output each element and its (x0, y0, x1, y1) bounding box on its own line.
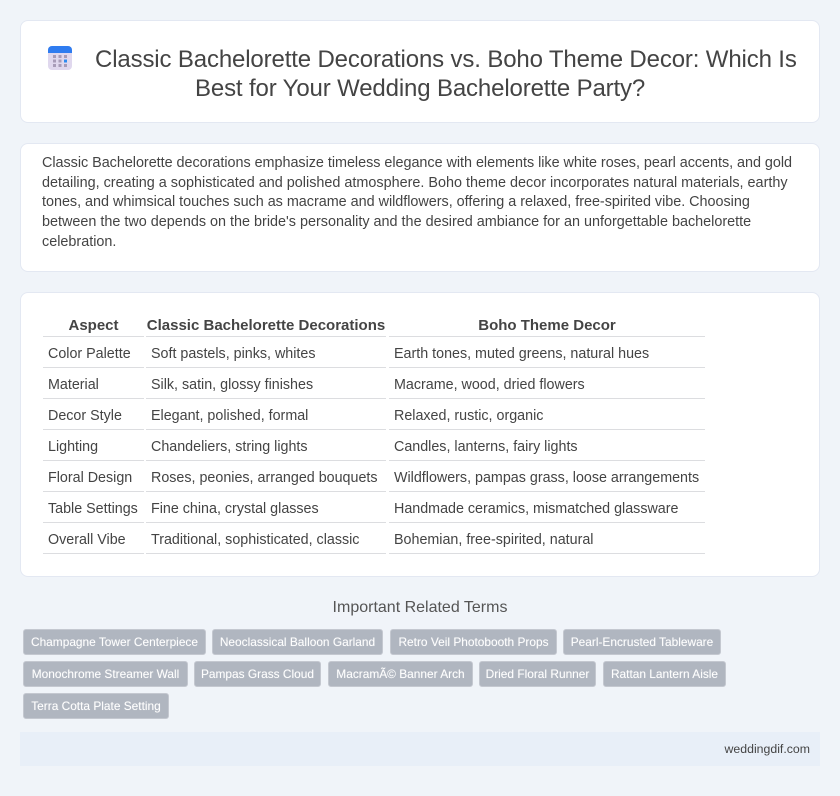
footer bar (20, 732, 820, 766)
title: Classic Bachelorette Decorations vs. Boho Theme Decor: Which Is (95, 46, 797, 73)
panel: header (20, 20, 820, 123)
title (95, 46, 797, 102)
related terms tags: Pampas Grass Cloud (201, 667, 314, 681)
summary text: Classic Bachelorette decorations emphasize timeless elegance with elements like white roses, pearl accents, and gold (42, 155, 792, 171)
comparison table: Wildflowers, pampas grass, loose arrangements (394, 470, 699, 486)
summary text: detailing, creating a sophisticated and polished atmosphere. Boho theme decor incorporates natural materials, earthy (42, 175, 788, 191)
comparison table: Bohemian, free-spirited, natural (394, 532, 593, 548)
related terms tags: Pearl-Encrusted Tableware (571, 635, 713, 649)
panel: comparison table (20, 292, 820, 577)
comparison table: Decor Style (48, 408, 122, 424)
related terms tags: MacramÃ© Banner Arch (336, 667, 465, 681)
comparison table: Macrame, wood, dried flowers (394, 377, 585, 393)
comparison table: Handmade ceramics, mismatched glassware (394, 501, 678, 517)
summary text: tones, and whimsical touches such as macrame and wildflowers, offering a relaxed, free-spirited vibe. Choosing (42, 194, 750, 210)
comparison table: Earth tones, muted greens, natural hues (394, 346, 649, 362)
comparison table: Aspect (68, 317, 119, 334)
comparison table: Soft pastels, pinks, whites (151, 346, 316, 362)
title: Best for Your Wedding Bachelorette Party? (195, 75, 645, 102)
comparison table: Table Settings (48, 501, 138, 517)
related terms tags: Monochrome Streamer Wall (32, 667, 179, 681)
comparison table: Material (48, 377, 99, 393)
related terms tags: Champagne Tower Centerpiece (31, 635, 198, 649)
related terms tags (23, 629, 726, 719)
comparison table: Color Palette (48, 346, 131, 362)
related terms tags: Neoclassical Balloon Garland (220, 635, 375, 649)
comparison table: Relaxed, rustic, organic (394, 408, 543, 424)
related terms heading: Important Related Terms (333, 599, 507, 616)
comparison table: Overall Vibe (48, 532, 126, 548)
related terms tags: Retro Veil Photobooth Props (398, 635, 549, 649)
comparison table: Chandeliers, string lights (151, 439, 308, 455)
comparison table: Elegant, polished, formal (151, 408, 308, 424)
related terms tags: Terra Cotta Plate Setting (31, 699, 161, 713)
related terms tags: Rattan Lantern Aisle (611, 667, 718, 681)
related terms tags: Dried Floral Runner (486, 667, 589, 681)
comparison table: Traditional, sophisticated, classic (151, 532, 359, 548)
comparison table: Floral Design (48, 470, 132, 486)
summary text (42, 155, 792, 250)
comparison table: Fine china, crystal glasses (151, 501, 319, 517)
comparison table: Roses, peonies, arranged bouquets (151, 470, 378, 486)
comparison table: Lighting (48, 439, 98, 455)
comparison table: Silk, satin, glossy finishes (151, 377, 313, 393)
summary text: between the two depends on the bride's personality and the desired ambiance for an unforgettable bachelorette (42, 214, 751, 230)
panel: summary paragraph (20, 143, 820, 272)
footer source: weddingdif.com (725, 742, 810, 756)
summary text: celebration. (42, 234, 116, 250)
comparison table: Boho Theme Decor (478, 317, 616, 334)
comparison table: Candles, lanterns, fairy lights (394, 439, 578, 455)
comparison table (43, 317, 705, 554)
comparison table: Classic Bachelorette Decorations (147, 317, 385, 334)
icon: calendar (48, 46, 72, 70)
